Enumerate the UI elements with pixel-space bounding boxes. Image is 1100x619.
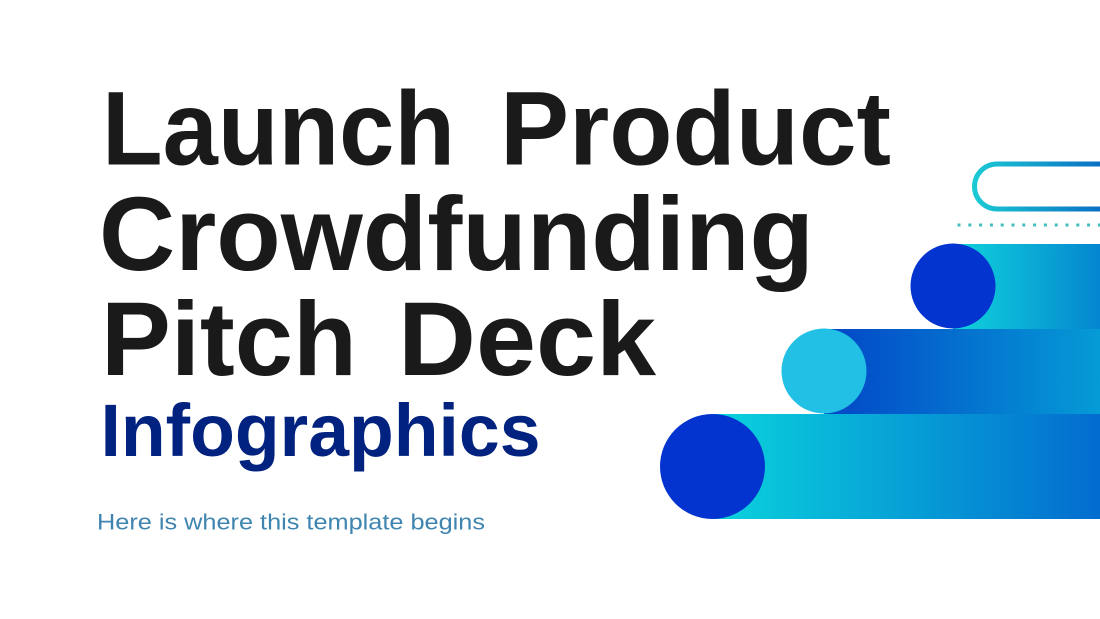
bar: top	[910, 244, 1100, 329]
circle: top	[910, 244, 996, 328]
circle: bottom	[660, 414, 765, 519]
title: Product	[500, 70, 891, 188]
title	[99, 70, 891, 398]
heading: Infographics: Infographics	[100, 389, 540, 472]
circle: middle	[782, 328, 866, 414]
subtitle: Here is where this template begins	[97, 510, 485, 534]
outlined pill	[974, 164, 1100, 209]
title: Deck	[398, 281, 657, 398]
bar: bottom	[660, 414, 1100, 519]
bar: middle	[782, 328, 1100, 414]
title: Launch	[102, 70, 455, 188]
title: Crowdfunding	[99, 176, 814, 293]
dotted line	[958, 224, 1100, 226]
title: Pitch	[101, 281, 357, 398]
